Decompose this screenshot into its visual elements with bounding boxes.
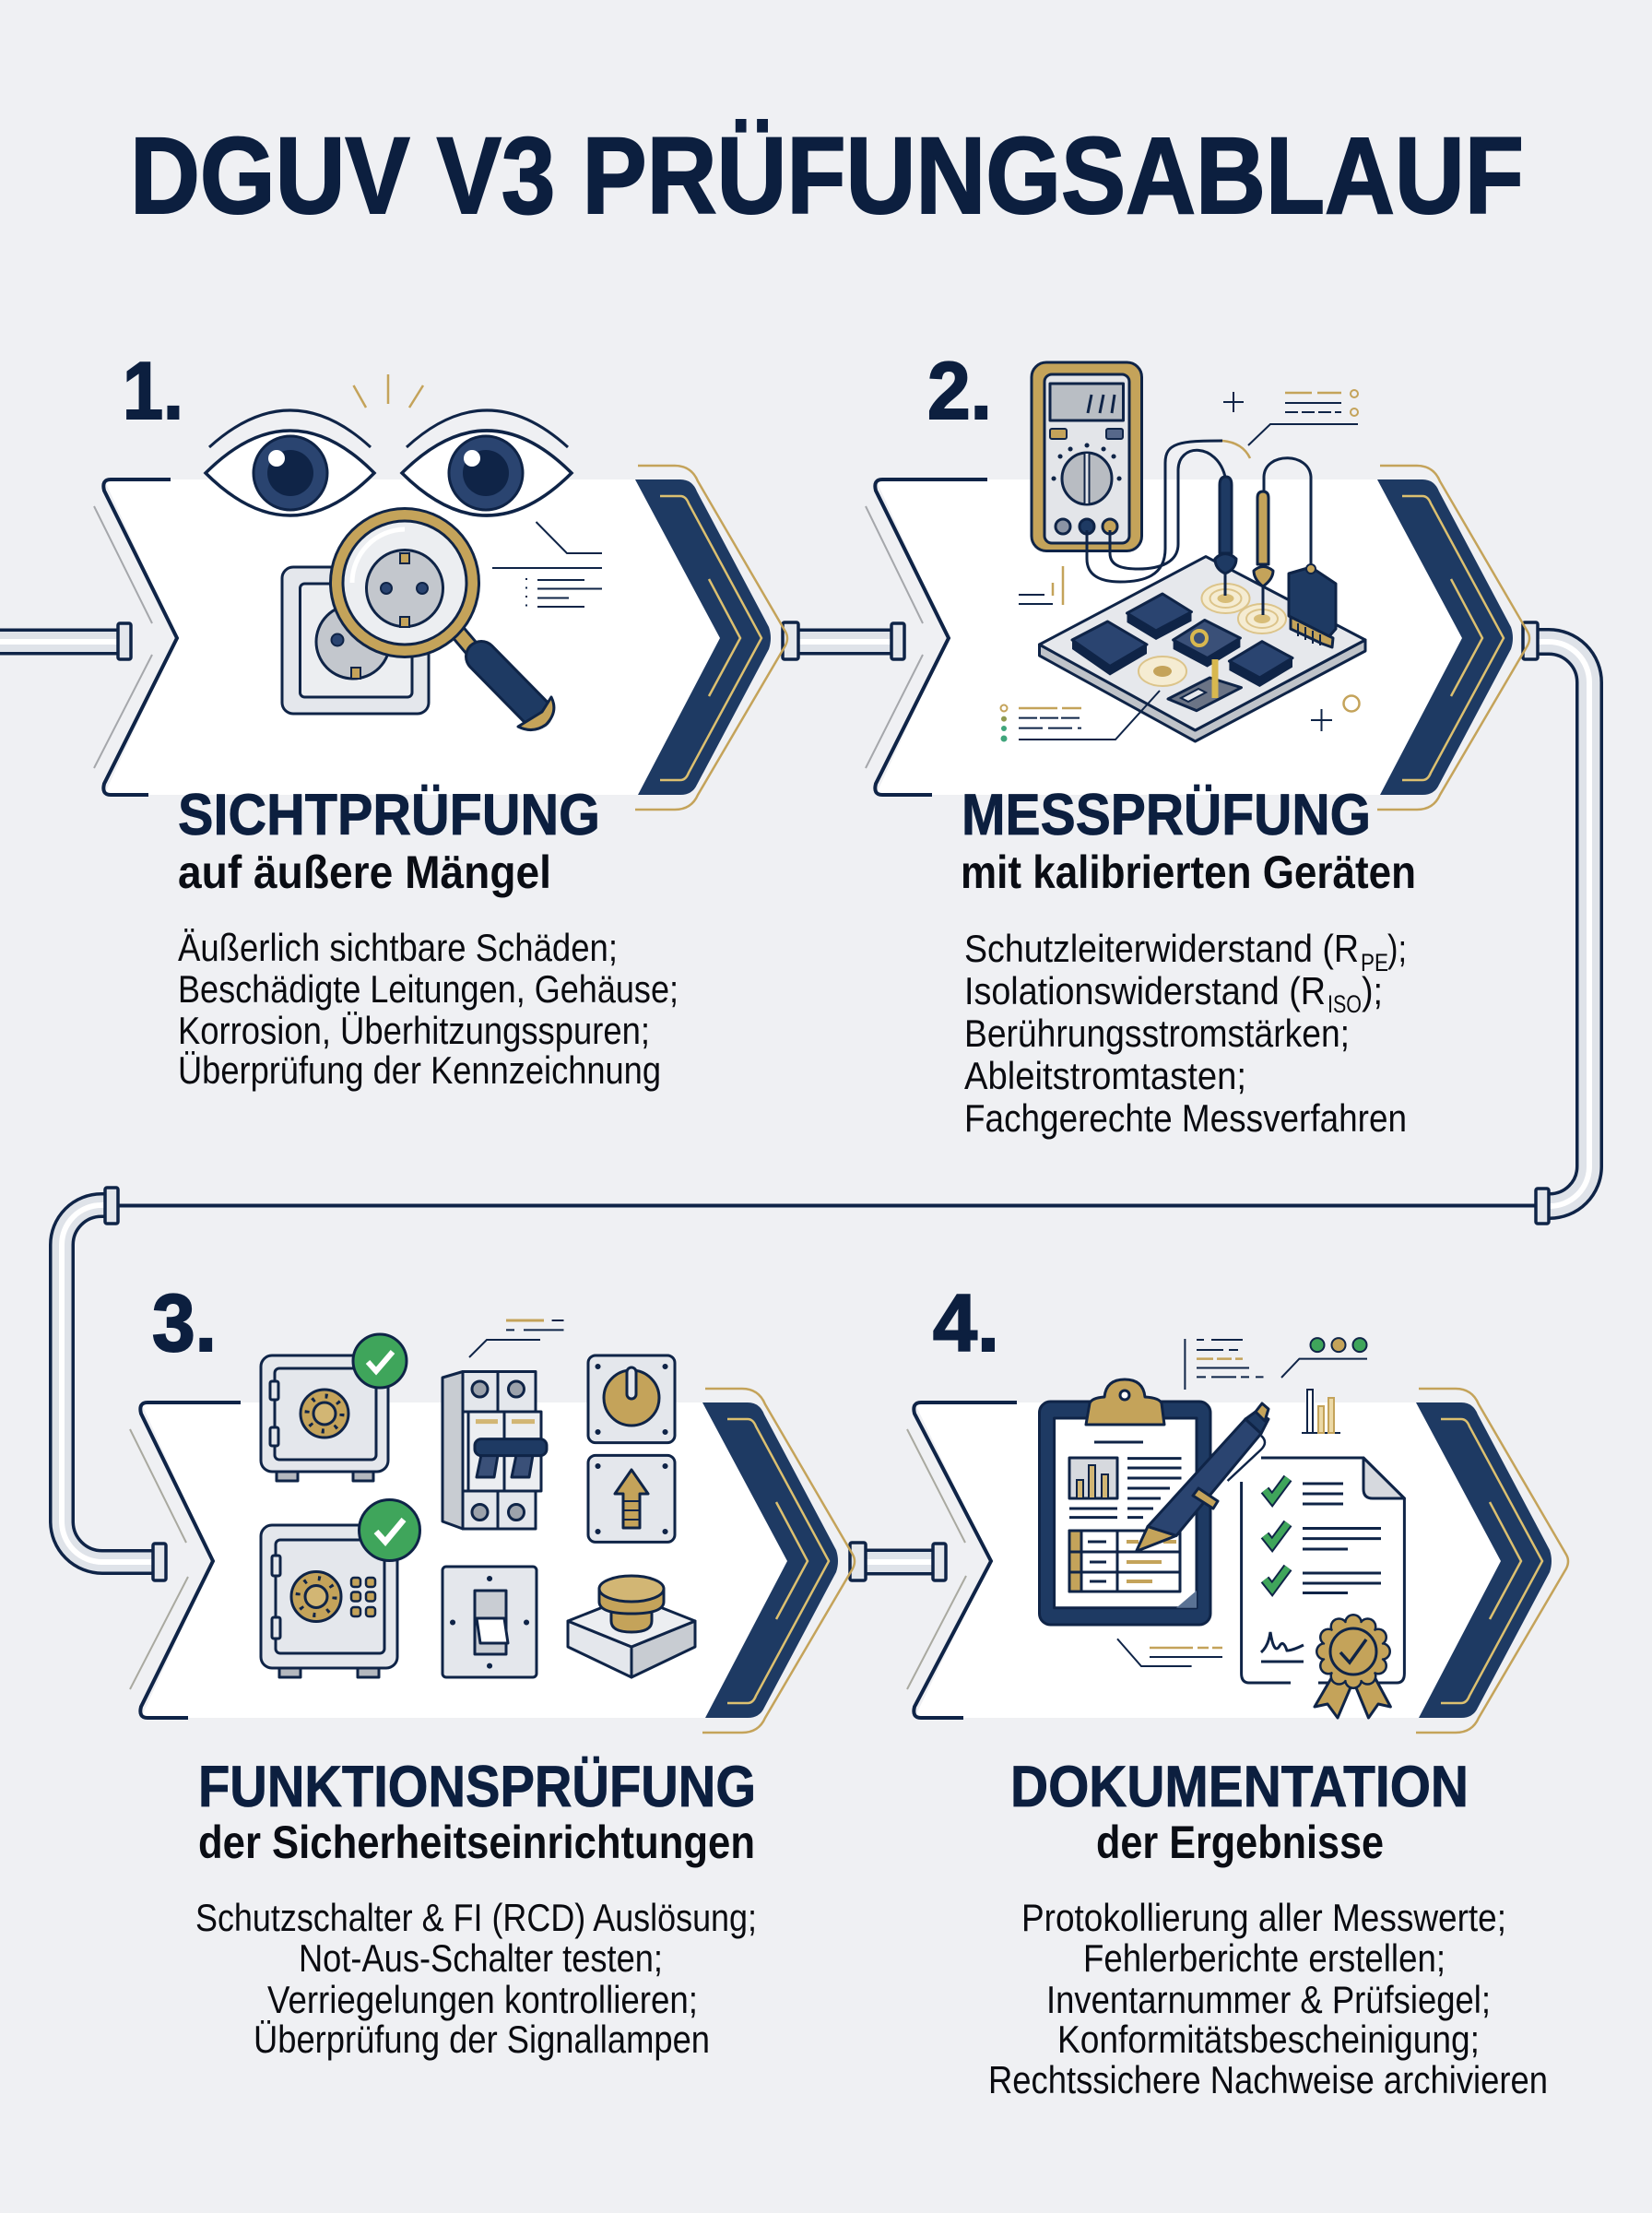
icon: measurement wires and probes (1087, 441, 1311, 615)
icon: safe with keypad and check (261, 1499, 420, 1677)
pipe: entry into step 1 (0, 623, 131, 659)
panel shape: white arrow (104, 479, 720, 795)
body text: Ableitstromtasten; (964, 1054, 1246, 1097)
body text (195, 1896, 757, 2061)
body text: Konformitätsbescheinigung; (1057, 2018, 1480, 2061)
body text: Schutzleiterwiderstand (R (964, 927, 1359, 970)
body text: Rechtssichere Nachweise archivieren (988, 2058, 1548, 2101)
panel outline left (866, 479, 987, 795)
pipe system connecting the steps (0, 622, 1589, 1580)
body text: Überprüfung der Signallampen (254, 2018, 710, 2061)
body text: Überprüfung der Kennzeichnung (178, 1048, 661, 1092)
body text: Korrosion, Überhitzungsspuren; (178, 1009, 650, 1052)
panel: step 3 Funktionsprüfung (130, 1277, 855, 2061)
panel: step 2 Messprüfung (866, 345, 1529, 1140)
icon: safe with check (261, 1334, 407, 1481)
body text: Inventarnummer & Prüfsiegel; (1046, 1978, 1491, 2021)
icon: circuit board (1040, 557, 1365, 741)
panel: step 1 Sichtprüfung (94, 345, 787, 1092)
body text: ISO (1328, 990, 1362, 1018)
chevron right (1377, 466, 1529, 810)
body text: Not-Aus-Schalter testen; (299, 1936, 663, 1980)
panel shape: white arrow (914, 1402, 1501, 1718)
body text: Äußerlich sichtbare Schäden; (178, 926, 618, 969)
body text (178, 926, 678, 1092)
callout lines (492, 522, 602, 609)
heading: SICHTPRÜFUNG (178, 783, 600, 847)
subheading: der Sicherheitseinrichtungen (198, 1817, 755, 1868)
chevron right (1416, 1389, 1568, 1733)
callout lines (1001, 390, 1359, 741)
icon: checklist document (1242, 1458, 1404, 1683)
body text: Isolationswiderstand (R (964, 969, 1326, 1012)
chevron right (635, 466, 787, 810)
pipe: step 1 to step 2 (783, 622, 904, 659)
icon: emergency stop button (568, 1576, 695, 1677)
number 4: 4. (933, 1277, 999, 1368)
body text: Fehlerberichte erstellen; (1083, 1936, 1446, 1980)
body text: Berührungsstromstärken; (964, 1012, 1350, 1055)
icon: pen (1137, 1403, 1268, 1551)
panel: step 4 Dokumentation (907, 1277, 1568, 2101)
title: DGUV V3 PRÜFUNGSABLAUF (130, 115, 1524, 237)
body text: PE (1361, 949, 1388, 976)
icon: rocker switch (442, 1567, 537, 1677)
subheading: der Ergebnisse (1096, 1817, 1384, 1868)
body text: Protokollierung aller Messwerte; (1021, 1896, 1506, 1939)
subheading: auf äußere Mängel (178, 846, 551, 898)
body text: Schutzschalter & FI (RCD) Auslösung; (195, 1896, 757, 1939)
number 2: 2. (927, 345, 992, 436)
body text: Beschädigte Leitungen, Gehäuse; (178, 967, 678, 1011)
callout lines (469, 1320, 564, 1357)
pipe: elbow on the left into step 3 (62, 1188, 166, 1580)
pipe: elbow on the right from step 2 down (1523, 622, 1589, 1224)
connecting line across the page (118, 1204, 1536, 1208)
heading: DOKUMENTATION (1010, 1755, 1469, 1819)
panel shape: white arrow (141, 1402, 787, 1718)
heading: FUNKTIONSPRÜFUNG (198, 1755, 756, 1819)
icon: socket under magnifier (282, 507, 554, 730)
icon: circuit breaker (442, 1372, 547, 1529)
icon: arrow plate (588, 1455, 675, 1542)
icon: plug-in module (1289, 564, 1336, 647)
body text (964, 927, 1407, 1140)
icon: power button plate (588, 1355, 675, 1443)
body text: ); (1362, 969, 1383, 1012)
number 1: 1. (123, 345, 183, 436)
number 3: 3. (152, 1277, 217, 1368)
icon: eyes looking (206, 374, 572, 515)
subheading: mit kalibrierten Geräten (961, 846, 1416, 898)
callout lines and mini chart (1117, 1338, 1367, 1666)
body text: Fachgerechte Messverfahren (964, 1096, 1407, 1140)
body text: ); (1387, 927, 1407, 970)
panel outline left (130, 1402, 241, 1718)
panel shape: white arrow (876, 479, 1462, 795)
body text: Verriegelungen kontrollieren; (267, 1978, 698, 2021)
heading: MESSPRÜFUNG (962, 783, 1371, 847)
body text (988, 1896, 1548, 2101)
panel outline left (94, 479, 177, 795)
icon: clipboard with report (1040, 1379, 1210, 1625)
chevron right (702, 1389, 855, 1733)
icon: certificate seal (1315, 1614, 1391, 1718)
pipe: step 3 to step 4 (850, 1543, 946, 1580)
icon: multimeter (1032, 362, 1141, 551)
panel outline left (907, 1402, 1017, 1718)
